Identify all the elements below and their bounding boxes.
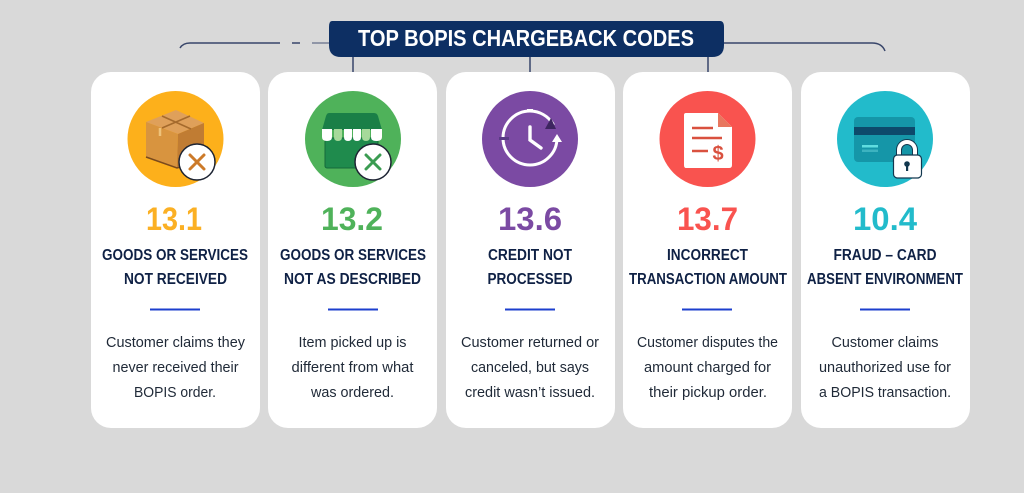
code heading: [102, 247, 248, 288]
icon: parcel with cross: [128, 91, 224, 187]
code heading: CREDIT NOT: [488, 247, 572, 264]
icon: invoice with dollar sign: [660, 91, 756, 187]
icon: invoice with dollar sign: $: [712, 143, 724, 165]
panel: code 13.7: [623, 72, 792, 428]
description: Item picked up is: [298, 335, 406, 351]
code heading: [280, 247, 426, 288]
description: BOPIS order.: [134, 385, 216, 401]
description: [292, 335, 414, 401]
description: [106, 335, 246, 401]
code heading: NOT AS DESCRIBED: [284, 271, 421, 288]
code heading: PROCESSED: [488, 271, 572, 288]
panel: code 13.6: [446, 72, 615, 428]
title banner: TOP BOPIS CHARGEBACK CODES: [358, 25, 694, 51]
code heading: GOODS OR SERVICES: [102, 247, 248, 264]
code heading: ABSENT ENVIRONMENT: [807, 271, 963, 288]
description: unauthorized use for: [819, 360, 951, 376]
description: [461, 335, 599, 401]
panel: code 10.4: [801, 72, 970, 428]
code heading: [488, 247, 572, 288]
code number: 13.7: [677, 201, 738, 237]
panel: code 13.1: [91, 72, 260, 428]
icon: clock with return arrows: [482, 91, 578, 187]
code number: 10.4: [853, 201, 917, 237]
code heading: [807, 247, 963, 288]
panel: code 13.2: [268, 72, 437, 428]
description: Customer claims: [832, 335, 938, 351]
description: Customer claims they: [106, 335, 246, 351]
code heading: FRAUD – CARD: [834, 247, 936, 264]
description: different from what: [292, 360, 414, 376]
description: [819, 335, 951, 401]
description: their pickup order.: [649, 385, 767, 401]
icon: credit card with padlock: [837, 91, 933, 187]
description: a BOPIS transaction.: [819, 385, 951, 401]
description: credit wasn’t issued.: [465, 385, 595, 401]
code heading: INCORRECT: [667, 247, 748, 264]
description: amount charged for: [644, 360, 771, 376]
title banner: [329, 21, 724, 57]
code heading: [629, 247, 787, 288]
description: Customer disputes the: [637, 335, 778, 351]
description: Customer returned or: [461, 335, 599, 351]
description: [637, 335, 778, 401]
icon: storefront with cross: [305, 91, 401, 187]
bracket connector: [180, 43, 885, 72]
code number: 13.1: [146, 201, 202, 237]
description: canceled, but says: [471, 360, 589, 376]
code heading: GOODS OR SERVICES: [280, 247, 426, 264]
code number: 13.2: [321, 201, 383, 237]
description: never received their: [112, 360, 239, 376]
code number: 13.6: [498, 201, 562, 237]
code heading: TRANSACTION AMOUNT: [629, 271, 787, 288]
description: was ordered.: [310, 385, 394, 401]
code heading: NOT RECEIVED: [124, 271, 227, 288]
